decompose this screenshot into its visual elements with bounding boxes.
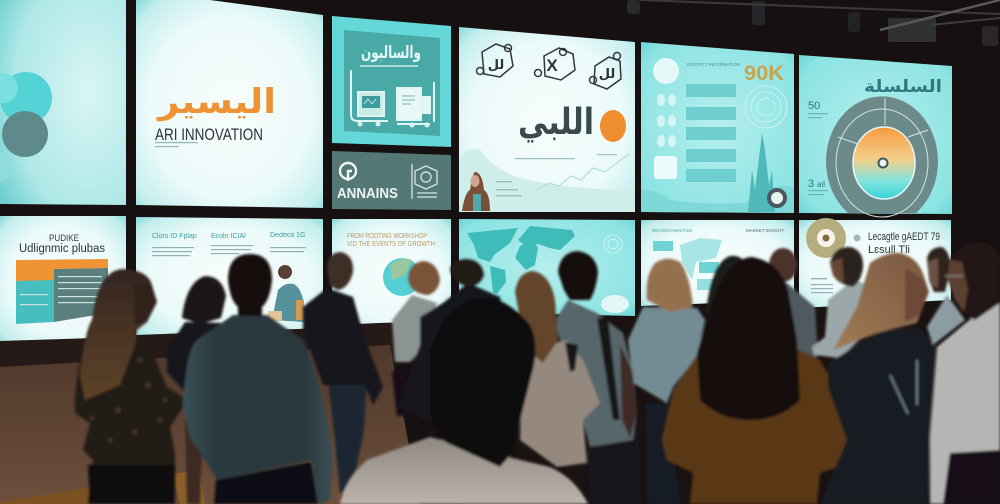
panel: globe board: [332, 219, 451, 325]
city towers: [748, 133, 775, 212]
medallion: [806, 218, 846, 258]
panel: bottom left orange and teal report: [0, 216, 126, 341]
small print: [155, 142, 198, 147]
portrait: [462, 172, 490, 211]
cloud: [601, 295, 629, 313]
icon column: [654, 94, 677, 179]
card heading: والسالبون: [361, 43, 421, 63]
ring icon: [769, 190, 785, 206]
panel: map with callouts: MARKET INSIGHT: [746, 228, 784, 233]
orange badge: [600, 110, 626, 142]
person: man in black jacket and jeans: [303, 252, 383, 493]
column headings: Dedeca 1G: [270, 232, 305, 239]
panel: circular chart board: 3: [808, 178, 814, 190]
circular chart: [826, 96, 938, 217]
panel: far left abstract circles: [0, 0, 126, 205]
person: blue-grey woman with blonde hair: [628, 259, 705, 504]
arabic heading: السلسلة: [864, 77, 942, 97]
company name: ARI INNOVATION: [155, 126, 263, 144]
person: man with glasses, far right: [930, 242, 1000, 504]
column text: [152, 245, 306, 256]
icon: P logo: [340, 163, 356, 181]
panel: circular chart board: [799, 55, 952, 217]
person: man with backpack strap: [557, 251, 640, 504]
person: front woman in brown sweater: [662, 257, 850, 504]
icon: overlapping circles: [0, 72, 52, 182]
report table: [16, 259, 108, 324]
person: man grey shirt right: [927, 247, 965, 345]
panel: ring medallion board: Lɛsull Tli: [868, 244, 910, 256]
body text: [811, 278, 833, 293]
arabic title: اللبي: [518, 102, 594, 143]
icon: hexagon seal: [412, 164, 437, 199]
panel: globe board: VID THE EVENTS OF GROWTH: [347, 241, 435, 248]
landscape shape: [459, 149, 635, 212]
illustration: researcher at desk: [268, 265, 305, 322]
teal callouts: [653, 241, 719, 290]
brand name: ANNAINS: [337, 185, 398, 202]
ring icon: [604, 235, 622, 253]
panel: bottom left orange and teal report: Udlignmic plubas: [19, 243, 105, 255]
icon: computer and projector: [351, 70, 434, 126]
panel: hexagon icons with arabic title: لل: [599, 67, 615, 82]
column headings: [152, 232, 305, 240]
report title: PUDIKE: [49, 233, 79, 243]
hexagon icon labels: لل: [488, 58, 504, 73]
panel: hexagon icons with arabic title: X: [546, 56, 558, 75]
panel: hexagon icons with arabic title: [459, 27, 635, 212]
heading: REGION ANALYSIS: [652, 228, 692, 233]
small caption: [496, 154, 617, 196]
person: woman with dark hair behind: [706, 256, 745, 330]
landscape: [641, 186, 794, 213]
heading: Lecagtle gAEDT 79: [868, 231, 940, 243]
person: man in dark jacket middle: [397, 259, 520, 440]
panel: Annains dark card: [332, 151, 451, 210]
world map: [467, 226, 575, 294]
round icon: [653, 58, 679, 84]
group: audience silhouettes: [75, 242, 1000, 504]
headline: FROM ROOTING WORKSHOP: [347, 233, 427, 240]
person: blonde woman with grey shirt: [392, 261, 440, 416]
person: woman left in floral blouse: [75, 269, 183, 504]
panel: bottom three-column text board: [136, 217, 323, 335]
panel: world map board: [459, 219, 635, 316]
column headings: Ecoln ICIAl: [211, 233, 246, 240]
arabic orange logotype: اليسير: [156, 82, 276, 122]
person: man far back right: [769, 248, 818, 400]
person: woman with lanyard, front right: [820, 253, 935, 504]
panel: circular chart board: ail: [817, 180, 825, 189]
person: man in grey-teal shirt: [183, 254, 333, 504]
panel: teal equipment card: [332, 16, 451, 147]
text rows: [686, 84, 736, 182]
hexagon icons: [476, 44, 621, 89]
big number: 90K: [744, 62, 784, 85]
person: man in white shirt, profile: [812, 247, 870, 358]
person: woman with blonde hair and beige top: [515, 271, 600, 467]
spiral rings: [745, 86, 787, 128]
panel: ring medallion board: [799, 218, 951, 308]
globe: [383, 258, 421, 296]
heading: DISTRICT INFORMATION: [687, 62, 740, 67]
panel: map with callouts: [641, 220, 794, 306]
person: woman in dark top behind: [167, 276, 227, 504]
panel: ARI Innovation logo: [136, 0, 323, 208]
lower wall and floor: [0, 300, 1000, 504]
left stats: 50: [808, 100, 820, 112]
panel: 90K statistics board: [641, 42, 794, 213]
faint map: [680, 238, 722, 280]
person: front centre with dark hair and white shirt: [340, 298, 592, 504]
ceiling lights and rig: [627, 0, 1000, 46]
line chart: [537, 154, 629, 190]
column headings: Clors ID Fplap: [152, 233, 197, 240]
